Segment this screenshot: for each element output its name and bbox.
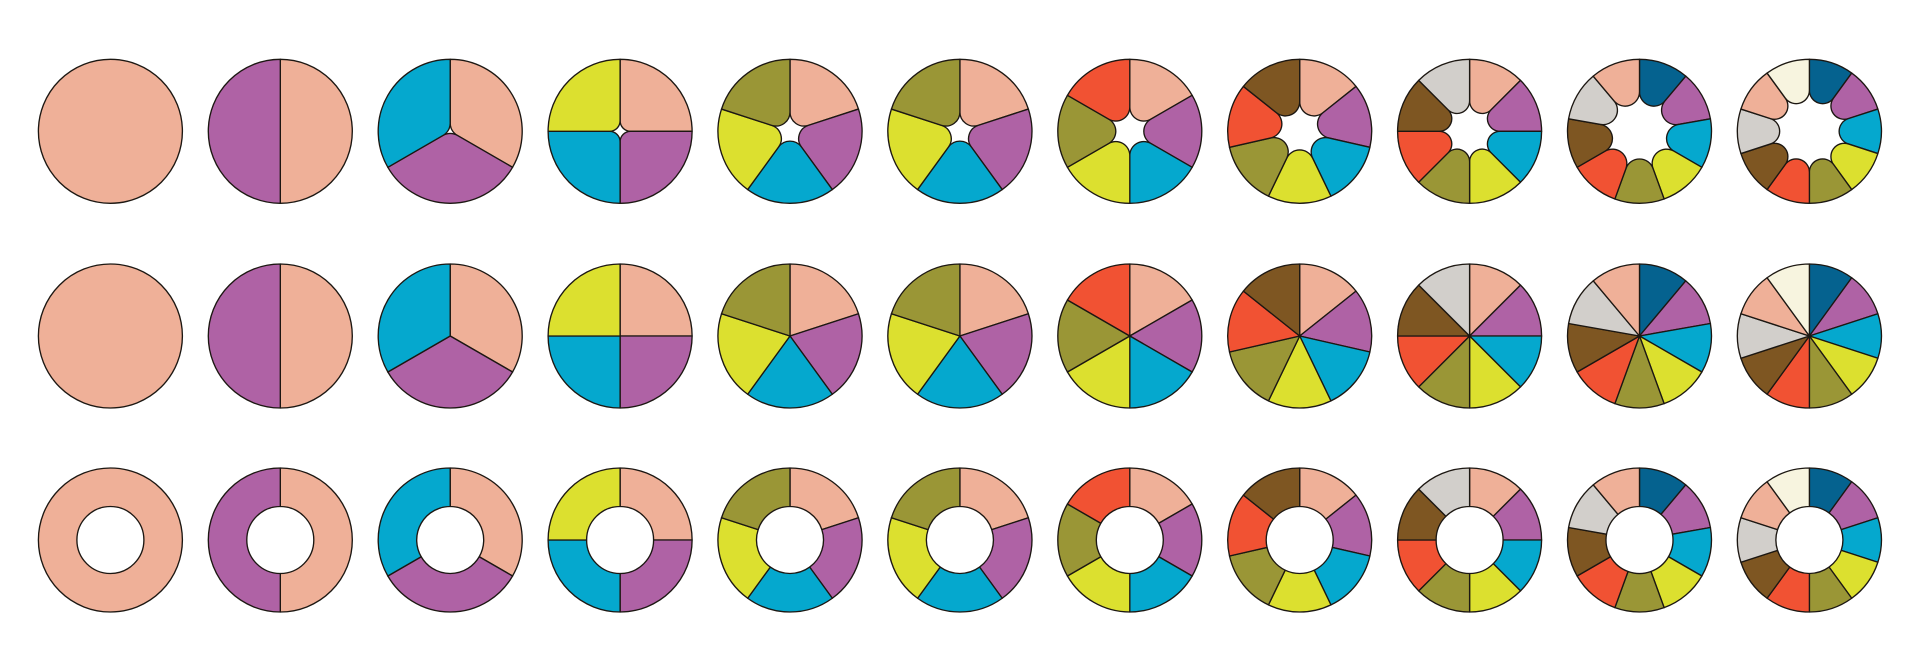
row 2: solid pie charts <box>38 246 1891 435</box>
pie: 10 petals <box>1728 48 1891 214</box>
pie: 1 segment, solid row <box>38 264 182 408</box>
pie: 10 segments, solid row <box>1728 253 1891 419</box>
pie: 1 segment, rounded row <box>38 59 182 203</box>
donut: 7 segments <box>1217 451 1391 629</box>
row 3: donut charts <box>38 450 1891 639</box>
pie: 3 petals <box>352 51 522 230</box>
pie: 5 segments, solid row, second copy <box>862 249 1050 435</box>
pie: 8 petals <box>1383 44 1557 218</box>
donut: 4 segments <box>548 468 692 612</box>
donut: 10 segments <box>1728 457 1891 623</box>
pie: 3 segments, solid row <box>352 256 522 434</box>
pie: 7 segments, solid row <box>1217 247 1391 425</box>
pie: 5 petals, second copy <box>862 44 1050 230</box>
pie: 5 segments, solid row <box>692 249 880 435</box>
row 1: rounded-petal pie charts <box>38 41 1891 230</box>
donut: 5 segments <box>692 453 880 639</box>
pie: 6 petals <box>1036 41 1223 221</box>
pie: 8 segments, solid row <box>1383 249 1557 423</box>
pie: 5 petals <box>692 44 880 230</box>
donut: 9 segments <box>1554 455 1721 623</box>
donut: 2 segments <box>208 468 352 612</box>
pie: 9 petals <box>1554 46 1721 215</box>
donut: 5 segments, second copy <box>862 453 1050 639</box>
pie: 2 segments, rounded row <box>208 59 352 203</box>
donut: 1 segment <box>38 468 182 612</box>
pie: 7 petals <box>1217 42 1391 221</box>
pie: 6 segments, solid row <box>1036 246 1223 426</box>
pie: 4 segments, solid row <box>548 264 692 408</box>
donut: 8 segments <box>1383 453 1557 627</box>
donut: 3 segments <box>352 460 522 638</box>
pie: 2 segments, solid row <box>208 264 352 408</box>
donut: 6 segments <box>1036 450 1223 630</box>
pie: 4 petals <box>548 59 692 203</box>
pie: 9 segments, solid row <box>1554 251 1721 419</box>
